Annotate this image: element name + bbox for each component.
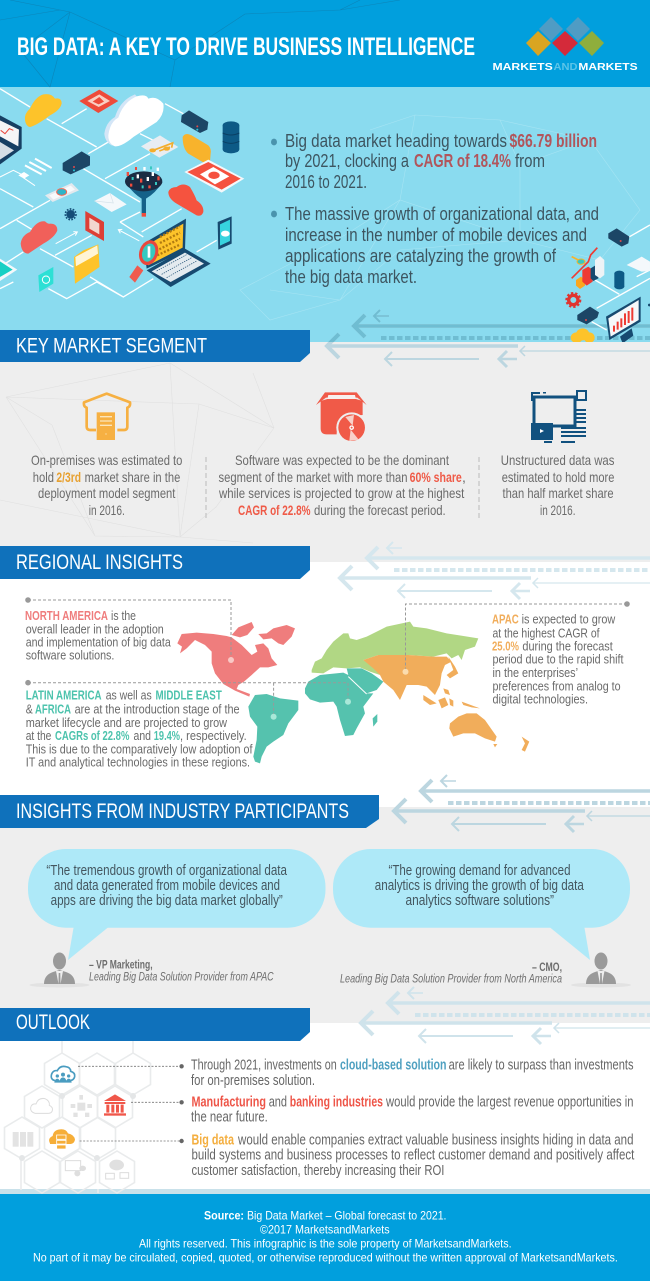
text: latin america, middle east and africa: [26, 688, 253, 770]
panel: quote left: [28, 849, 326, 988]
bullet one: CAGR of 18.4%: [414, 151, 511, 171]
bullet one: by 2021, clocking a: [285, 151, 410, 171]
quote text right: [375, 863, 585, 909]
bullet two: the big data market.: [285, 267, 417, 287]
text: on-premises: hold: [33, 469, 54, 485]
leader line: cloud: [78, 1064, 184, 1069]
bullet two: applications are catalyzing the growth of: [285, 246, 557, 266]
text: unstructured: in 2016.: [540, 502, 576, 518]
text: apac: in the enterprises’: [492, 665, 578, 680]
bullet two: increase in the number of mobile devices and: [285, 225, 587, 245]
text: software: during the forecast period.: [314, 502, 446, 518]
leader line: data: [80, 1139, 184, 1143]
attribution right: [340, 960, 562, 986]
quote text right: analytics software solutions”: [406, 893, 554, 909]
world map: [177, 622, 529, 763]
icon: second server: [63, 151, 90, 174]
text: north america: is the: [111, 608, 136, 623]
bullet one: from: [515, 151, 545, 171]
map: europe and russia: [312, 622, 478, 675]
panel: unstructured data segment: [501, 391, 615, 518]
text: outlook two: [191, 1094, 634, 1126]
icon: cloud with people: [51, 1066, 75, 1083]
attribution left: Leading Big Data Solution Provider from APAC: [89, 970, 274, 984]
text: latin america, middle east and africa: &: [26, 702, 33, 717]
decorative arrows: key market: [327, 310, 650, 367]
text: latin america, middle east and africa: CAGRs of 22.8%: [55, 728, 130, 743]
quote text right: “The growing demand for advanced: [388, 863, 570, 879]
icon: server: [181, 110, 208, 133]
icon: speech bubble: [182, 134, 211, 162]
icon: person right: [571, 952, 631, 988]
attribution left: [89, 958, 274, 984]
text: latin america, middle east and africa: IT and analytical technologies in these regions.: [26, 755, 250, 770]
callout: north america leader line: [25, 597, 234, 663]
icon: bank: [104, 1094, 126, 1116]
text: latin america, middle east and africa: and: [134, 728, 151, 743]
icon: gear: [65, 209, 76, 220]
quote text left: “The tremendous growth of organizational data: [46, 863, 288, 879]
icon: person left: [30, 952, 90, 988]
text: apac: is expected to grow: [522, 612, 616, 627]
panel: on-premises segment: [31, 394, 183, 518]
icon: red tile: [79, 90, 118, 113]
text: on-premises: [31, 452, 183, 518]
header bar: [0, 0, 650, 87]
map: asia pacific: [363, 655, 529, 752]
text: latin america, middle east and africa: LATIN AMERICA: [26, 688, 102, 703]
text: software: ,: [462, 469, 466, 485]
attribution right: – CMO,: [532, 960, 562, 974]
text: software: 60% share: [410, 469, 462, 485]
text: on-premises: 2/3rd: [56, 469, 81, 485]
icon: white cloud: [104, 94, 164, 146]
text: outlook one: cloud-based solution: [340, 1057, 446, 1074]
logo: MARKETS: [492, 61, 553, 73]
icon: monitor chart: [606, 297, 641, 343]
copyright lines: ©2017 MarketsandMarkets: [260, 1223, 390, 1237]
speech bubble left: [28, 849, 326, 960]
text: on-premises: On-premises was estimated to: [31, 452, 183, 468]
text: latin america, middle east and africa: MIDDLE EAST: [156, 688, 222, 703]
map: north america: [177, 622, 295, 697]
text: outlook two: banking industries: [290, 1094, 383, 1111]
icon: navy phone: [218, 216, 232, 250]
icon: server lower right: [577, 307, 599, 324]
logo: MARKETS: [578, 61, 638, 73]
footer: [0, 1194, 650, 1281]
key market texture: [0, 363, 274, 543]
icon: camera tile: [184, 160, 244, 193]
text: outlook three: Big data: [192, 1132, 234, 1149]
text: apac: [492, 612, 624, 707]
leader line: bank: [131, 1100, 184, 1105]
text: on-premises: deployment model segment: [38, 485, 175, 501]
bullet two: [271, 204, 599, 287]
icon: yellow cloud right: [571, 328, 595, 343]
quote text left: [46, 863, 288, 909]
banner: outlook: [0, 1008, 310, 1041]
hexagon icon cluster: [4, 1041, 150, 1193]
text: apac: at the highest CAGR of: [492, 626, 600, 641]
icon: yellow laptop: [143, 219, 211, 287]
text: latin america, middle east and africa: at the: [26, 728, 51, 743]
text: apac: period due to the rapid shift: [492, 652, 624, 667]
icon: bar chart: [572, 248, 604, 289]
text: latin america, middle east and africa: as well as: [106, 688, 152, 703]
icon: cloud network: [106, 1160, 129, 1179]
text: outlook three: customer satisfaction, thereby increasing their ROI: [192, 1162, 444, 1179]
hero illustration: left isometric icons: [0, 89, 244, 299]
banner: insights from industry participants: [0, 795, 379, 828]
callout: latin america and africa leader lines: [25, 680, 351, 720]
attribution right: Leading Big Data Solution Provider from North America: [340, 972, 562, 986]
text: unstructured: Unstructured data was: [501, 452, 614, 468]
hero illustration: right isometric icons: [566, 225, 650, 343]
text: north america: NORTH AMERICA: [25, 608, 108, 623]
map: africa and middle east: [305, 668, 383, 736]
text: north america: overall leader in the adoption: [26, 622, 164, 637]
quote text right: analytics is driving the growth of big data: [375, 878, 585, 894]
icon: folder: [74, 244, 99, 284]
text: outlook one: [191, 1057, 634, 1089]
banner: key market segment: KEY MARKET SEGMENT: [16, 335, 207, 358]
bullet one: Big data market heading towards: [285, 131, 507, 151]
banner: outlook: OUTLOOK: [16, 1011, 90, 1034]
text: on-premises: market share in the: [85, 469, 180, 485]
callout: apac leader line: [402, 601, 630, 675]
text: outlook three: [192, 1132, 635, 1179]
icon: data funnel: [125, 166, 163, 217]
icon: envelope: [94, 193, 127, 212]
bullet one: [271, 131, 597, 192]
text: unstructured: estimated to hold more: [502, 469, 615, 485]
banner: regional insights: REGIONAL INSIGHTS: [16, 551, 183, 574]
source line: Big Data Market – Global forecast to 2021.: [247, 1209, 446, 1223]
text: north america: software solutions.: [26, 648, 114, 663]
text: software: segment of the market with more than: [218, 469, 408, 485]
text: latin america, middle east and africa: market lifecycle and are projected to grow: [26, 715, 228, 730]
text: apac: 25.0%: [492, 638, 519, 653]
icon: data cloud: [49, 1129, 75, 1149]
icon: network nodes: [71, 1095, 92, 1117]
text: unstructured: [501, 452, 615, 518]
icon: coral cloud: [21, 221, 57, 254]
icon: server right: [608, 228, 629, 247]
icon: envelope right: [627, 257, 650, 272]
text: north america: [25, 608, 171, 663]
icon: house with server: [84, 394, 130, 440]
text: latin america, middle east and africa: are at the introduction stage of the: [75, 702, 240, 717]
text: apac: APAC: [492, 612, 519, 627]
banner: key market segment: [0, 330, 310, 362]
quote text left: apps are driving the big data market globally”: [51, 893, 283, 909]
decorative arrows: insights: [394, 775, 650, 832]
text: software: Software was expected to be the dominant: [235, 452, 449, 468]
logo: [492, 17, 638, 73]
icon: red cloud: [168, 184, 203, 216]
text: apac: preferences from analog to: [492, 678, 621, 693]
icon: left laptop: [0, 115, 22, 164]
text: software: [218, 452, 466, 518]
text: outlook two: and: [269, 1094, 287, 1111]
icon: yellow cloud: [25, 94, 62, 127]
copyright lines: All rights reserved. This infographic is the sole property of MarketsandMarkets.: [139, 1237, 512, 1251]
decorative arrows: outlook: [361, 987, 650, 1044]
attribution left: – VP Marketing,: [89, 958, 153, 972]
text: apac: during the forecast: [522, 638, 613, 653]
text: software: CAGR of 22.8%: [238, 502, 311, 518]
quote text left: and data generated from mobile devices and: [54, 878, 280, 894]
text: outlook one: for on-premises solution.: [191, 1072, 315, 1089]
bullet one: 2016 to 2021.: [285, 172, 367, 192]
icon: left teal tile: [0, 259, 17, 281]
banner: insights from industry participants: INSIGHTS FROM INDUSTRY PARTICIPANTS: [16, 800, 349, 823]
icon: database: [223, 121, 239, 153]
hero network texture: [240, 115, 640, 320]
icon: database right: [614, 271, 624, 289]
icon: music tile: [141, 135, 178, 158]
text: outlook two: the near future.: [191, 1109, 268, 1126]
text: latin america, middle east and africa: 19.4%: [154, 728, 180, 743]
text: north america: and implementation of big data: [26, 635, 171, 650]
text: latin america, middle east and africa: AFRICA: [35, 702, 71, 717]
icon: magnifier: [129, 240, 158, 282]
icon: money: [65, 1161, 86, 1176]
icon: software box with disc: [316, 392, 367, 443]
icon: phone tile: [45, 183, 79, 202]
icon: teal tablet: [38, 267, 53, 292]
icon: monitor with documents: [531, 391, 586, 443]
text: outlook two: Manufacturing: [192, 1094, 266, 1111]
banner: regional insights: [0, 546, 310, 579]
text: latin america, middle east and africa: , respectively.: [180, 728, 247, 743]
text: apac: digital technologies.: [492, 692, 588, 707]
panel: quote right: [333, 849, 631, 988]
source line: Source:: [204, 1209, 244, 1223]
icon: red tablet: [85, 211, 104, 241]
map: south america: [248, 694, 298, 763]
hero text: [271, 131, 599, 287]
text: outlook one: Through 2021, investments on: [191, 1057, 337, 1074]
panel: software segment: [218, 392, 466, 518]
copyright lines: [33, 1223, 618, 1265]
text: unstructured: than half market share: [502, 485, 614, 501]
text: software: while services is projected to grow at the highest: [218, 485, 464, 501]
icon: server rack: [13, 1132, 33, 1147]
icon: red gear: [566, 293, 580, 307]
text: on-premises: in 2016.: [89, 502, 125, 518]
logo: AND: [554, 61, 578, 73]
bullet one: $66.79 billion: [510, 131, 597, 151]
icon: wifi cloud: [31, 1098, 53, 1113]
speech bubble right: [333, 849, 630, 960]
decorative arrows: regional: [340, 542, 650, 599]
text: latin america, middle east and africa: This is due to the comparatively low adoption of: [26, 741, 253, 756]
